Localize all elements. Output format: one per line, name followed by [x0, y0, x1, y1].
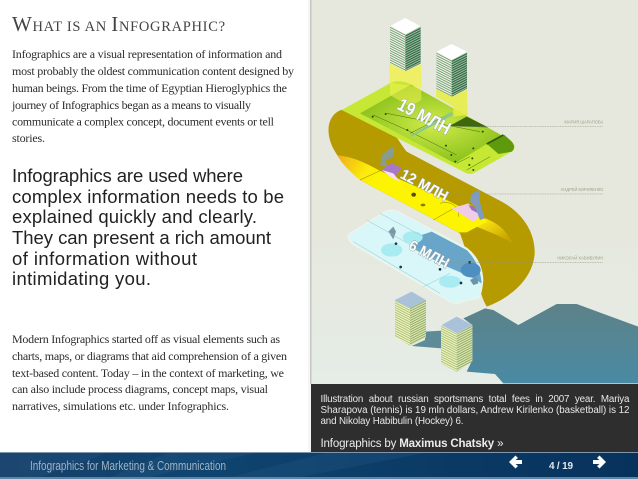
text block: intro paragraph: journey of Infographics began as a means to visually [11, 98, 251, 112]
icon: next arrow [593, 456, 606, 468]
text block: intro paragraph: stories. [12, 131, 45, 145]
caption credit: Infographics by Maximus Chatsky » [320, 438, 504, 450]
footer title: Infographics for Marketing & Communication [30, 459, 226, 473]
building: bottom right [441, 317, 472, 372]
text block: large statement: explained quickly and clearly. [12, 206, 257, 227]
text block: closing paragraph: can also include process diagrams, concept maps, visual [12, 382, 269, 396]
icon: previous arrow [509, 456, 522, 468]
building beam over court: left [390, 83, 421, 107]
title: WHAT IS AN INFOGRAPHIC? [12, 12, 225, 36]
green tennis court [342, 81, 515, 174]
illustration: dollar sign of sports courts [328, 18, 638, 383]
text block: closing paragraph: narratives, simulations etc. under Infographics. [12, 399, 229, 413]
building: top left [389, 18, 422, 87]
mustard ribbon [328, 109, 535, 307]
text block: closing paragraph [12, 332, 287, 413]
athlete names: МАРИЯ ШАРАПОВА [564, 120, 603, 125]
building: top right [436, 44, 467, 97]
text block: intro paragraph: most probably the oldest communication content designed by [12, 64, 294, 78]
text block: large statement: of information without [12, 248, 197, 269]
text block: closing paragraph: Modern Infographics started off as visual elements such as [12, 332, 280, 346]
cyan hockey rink [348, 210, 483, 303]
panel: illustration background [311, 0, 638, 384]
yellow basketball floor [337, 155, 487, 232]
text block: large statement: intimidating you. [12, 268, 151, 289]
building: bottom left [395, 292, 426, 346]
callout lines [443, 127, 603, 262]
athlete names: АНДРЕЙ КИРИЛЕНКО [561, 187, 604, 192]
building beam: top right [436, 89, 468, 117]
label: 19 mln: 19 МЛН [394, 94, 454, 139]
caption text: and Nikolay Habibulin (Hockey) 6. [320, 416, 464, 427]
text block: large statement [12, 165, 284, 289]
footer bar [0, 452, 638, 479]
text block: intro paragraph: communicate a complex concept, document events or tell [12, 114, 275, 128]
label: 6 mln: 6 МЛН [406, 238, 452, 272]
text block: large statement: They can present a rich amount [12, 227, 271, 248]
panel: caption [311, 384, 638, 452]
text block: intro paragraph: human beings. From the time of Egyptian Hieroglyphics the [12, 81, 287, 95]
orange wedge on ribbon bend [477, 217, 512, 243]
text block: intro paragraph: Infographics are a visual representation of information and [12, 47, 282, 61]
text block: closing paragraph: text-based content. Today – in the context of marketing, we [12, 366, 284, 380]
text block: closing paragraph: charts, maps, or diagrams that aid comprehension of a given [12, 349, 287, 363]
label: 12 mln: 12 МЛН [397, 167, 451, 205]
caption text: Sharapova (tennis) is 19 mln dollars, Andrew Kirilenko (basketball) is 12 [320, 405, 630, 416]
panel: left text background [0, 0, 311, 452]
text block: intro paragraph [11, 47, 294, 145]
caption text: Illustration about russian sportsmans total fees in 2007 year. Mariya [320, 394, 630, 405]
text block: large statement: Infographics are used where [12, 165, 243, 186]
page number: 4 / 19 [549, 461, 573, 472]
athlete names: НИКОЛАЙ ХАБИБУЛИН [557, 255, 603, 260]
hoops [380, 145, 394, 167]
caption text [320, 394, 630, 427]
athlete names [557, 120, 604, 260]
shadow on ground [412, 304, 638, 383]
text block: large statement: complex information needs to be [12, 186, 284, 207]
